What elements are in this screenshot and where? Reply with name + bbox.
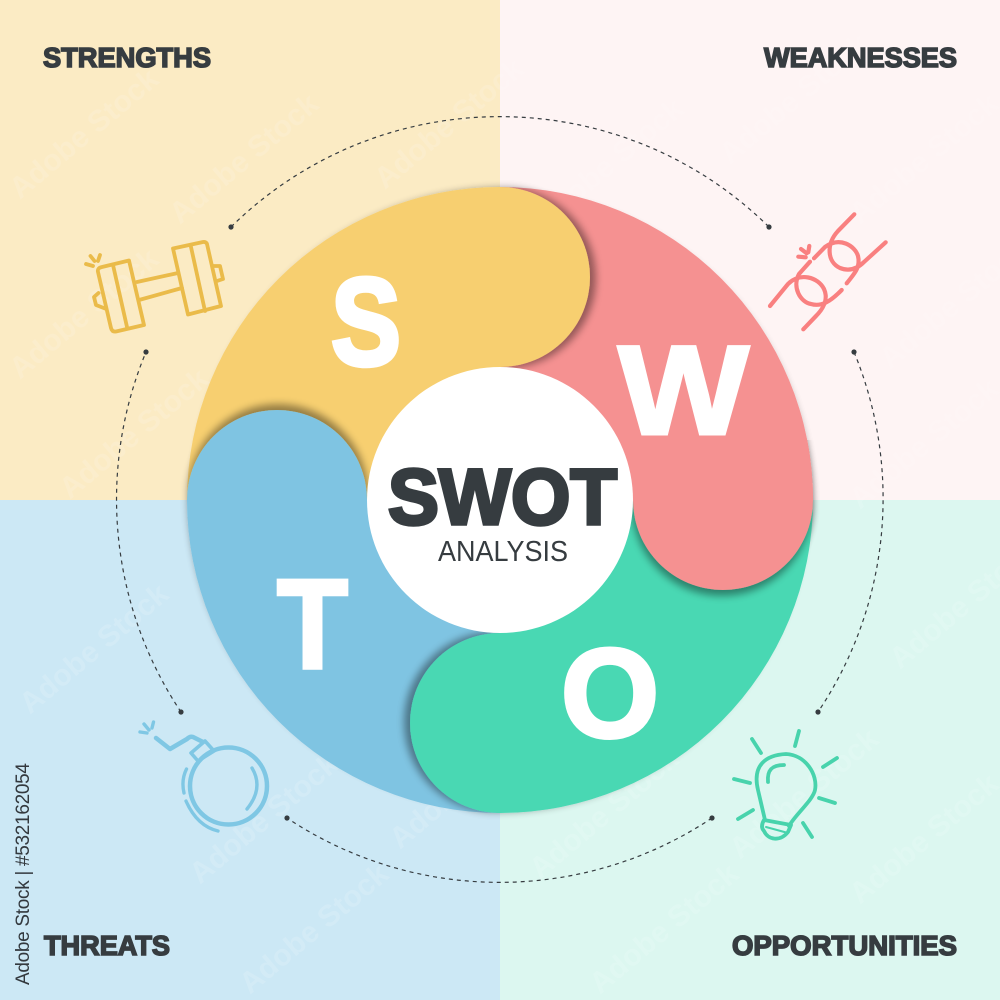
text: Adobe Stock bbox=[383, 712, 545, 855]
center title: SWOT bbox=[388, 452, 617, 541]
center circle bbox=[367, 367, 633, 633]
segment: T blue bbox=[187, 410, 500, 813]
panel: threats background bbox=[0, 500, 500, 1000]
text: Adobe Stock bbox=[368, 52, 530, 195]
text: Adobe Stock bbox=[3, 62, 165, 205]
icon: broken chain bbox=[770, 214, 886, 329]
text: Adobe Stock bbox=[13, 577, 175, 720]
text: Adobe Stock bbox=[163, 87, 325, 230]
segment: W red bbox=[500, 187, 813, 590]
icon: dumbbell bbox=[86, 242, 223, 332]
letter O: O bbox=[561, 623, 659, 764]
heading: weaknesses: WEAKNESSES bbox=[764, 42, 957, 73]
panel: strengths background bbox=[0, 0, 500, 500]
segment: W red tip overlapping green bbox=[630, 440, 817, 600]
text: Adobe Stock bbox=[528, 92, 690, 235]
segment: S yellow bbox=[187, 187, 590, 500]
letter S: S bbox=[331, 254, 401, 392]
letter W: W bbox=[618, 319, 749, 461]
text: Adobe Stock bbox=[523, 742, 685, 885]
text: Adobe Stock bbox=[183, 747, 345, 890]
text: Adobe Stock bbox=[583, 857, 745, 1000]
icon: light bulb bbox=[734, 731, 837, 839]
panel: opportunities background bbox=[500, 500, 1000, 1000]
heading: opportunities: OPPORTUNITIES bbox=[732, 930, 957, 961]
heading: strengths: STRENGTHS bbox=[43, 42, 211, 73]
heading: threats: THREATS bbox=[44, 930, 170, 961]
text: Adobe Stock bbox=[723, 722, 885, 865]
stock credit: Adobe Stock | #532162054 bbox=[13, 763, 34, 985]
center subtitle: ANALYSIS bbox=[438, 536, 568, 568]
panel: weaknesses background bbox=[500, 0, 1000, 500]
icon: bomb bbox=[140, 722, 267, 831]
text: Adobe Stock bbox=[53, 362, 215, 505]
segment: O green bbox=[410, 500, 813, 813]
text: Adobe Stock bbox=[713, 27, 875, 170]
text: Adobe Stock bbox=[3, 242, 165, 385]
text: Adobe Stock bbox=[233, 857, 395, 1000]
letter T: T bbox=[277, 553, 348, 695]
dashed orbit ring bbox=[117, 117, 883, 882]
